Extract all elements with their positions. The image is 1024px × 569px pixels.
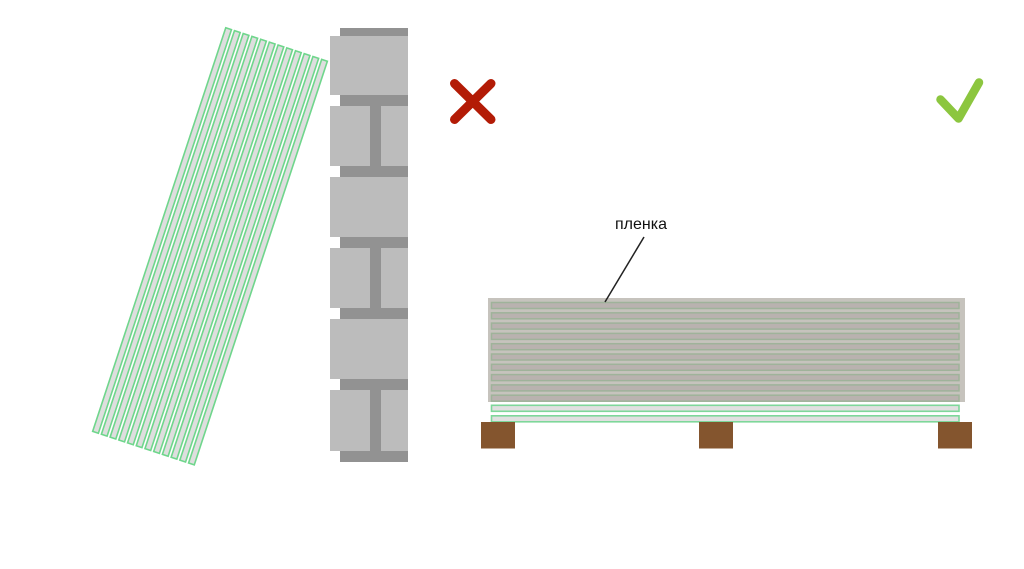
callout: film label: пленка [615,216,667,233]
icon: green check mark [940,82,979,118]
incorrect storage: sheets leaning on wall [93,28,327,465]
icon: red cross [454,84,491,120]
stacked sheets under film [492,302,959,401]
wooden supports [481,422,972,448]
uncovered bottom sheets [492,405,959,422]
callout: film label [605,216,667,302]
wall: masonry section [330,28,408,462]
protective film over stack [488,298,965,402]
